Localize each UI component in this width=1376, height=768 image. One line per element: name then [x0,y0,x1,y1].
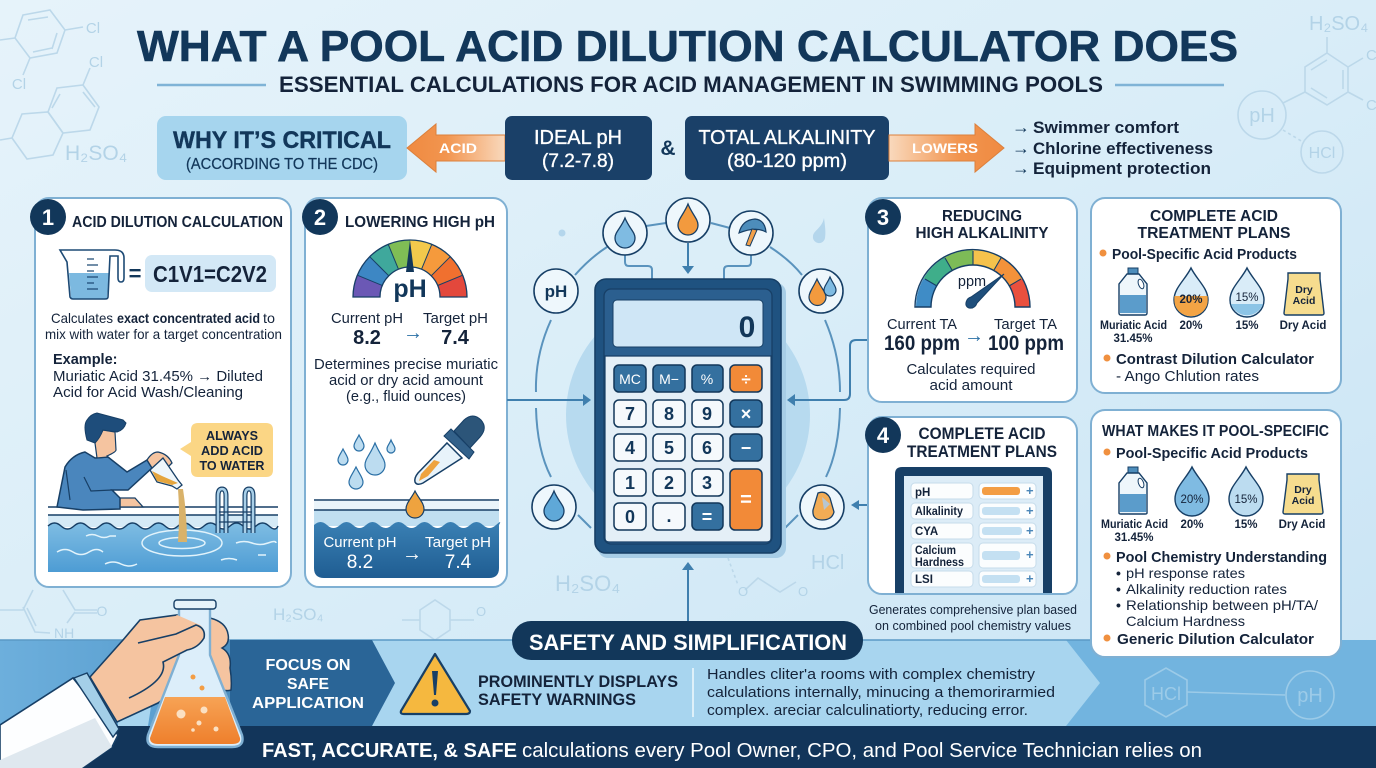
thumb [140,615,204,672]
icon node: blue drop lower [532,485,576,529]
small decorative blobs [558,218,825,243]
background formula labels: HCl [1309,145,1335,162]
arrow: panel 4 to hcl node [851,500,868,510]
divider and simplification text: Handles cliter'a rooms with complex chemistry [707,666,1036,683]
icon: dry acid bag [1284,273,1324,315]
ideal pH box: (7.2-7.8) [542,151,614,172]
icon: 15 percent drop: 15% [1235,292,1259,304]
example text: Muriatic Acid 31.45% → Diluted [53,369,263,385]
icon: 20 percent drop [1174,268,1208,317]
why it's critical box [157,116,407,180]
pool water with readings: → [402,543,422,565]
TA readings [884,316,1064,355]
calculator keypad: 9 [702,404,712,424]
background formula labels: NH [54,625,74,641]
heading 3 [916,208,1049,242]
heading [1138,208,1291,242]
pool water with readings [314,491,500,578]
why it's critical box: WHY IT’S CRITICAL [173,127,391,154]
calculator keypad: 2 [664,473,674,493]
tablet with chemistry fields [895,467,1052,593]
total alkalinity box: (80-120 ppm) [727,151,847,172]
background formula labels: Cl [89,54,103,71]
glow circle behind calculator [566,293,810,537]
badge 4: 4 [877,423,890,448]
connectors around calculator [536,223,840,528]
heading 3: HIGH ALKALINITY [916,225,1049,242]
TA readings: 160 ppm [884,332,960,355]
subheading contrast: - Ango Chlution rates [1116,369,1259,385]
divider and simplification text: calculations internally, minucing a themorirarmied [707,684,1055,701]
benefits list: → [1012,158,1030,178]
alkalinity gauge [915,250,1030,308]
background formula labels: HCl [811,552,844,574]
badge 3 [865,199,901,235]
panel: what makes it pool-specific [1091,410,1341,657]
pH gauge [353,240,467,303]
divider and simplification text: complex. areciar calculinatiorty, reducing error. [707,702,1028,719]
icon: muriatic bottle [1119,467,1147,514]
icon: muriatic bottle [1119,268,1147,315]
tablet with chemistry fields: + [1026,571,1034,586]
background formula labels: O [738,584,748,599]
product labels: Dry Acid [1280,320,1326,332]
footer [0,726,1376,768]
calculator [595,279,786,558]
badge 1: 1 [42,205,54,230]
title: WHAT A POOL ACID DILUTION CALCULATOR DOES [137,22,1238,71]
heading 2: LOWERING HIGH pH [345,214,495,231]
formula pill: C1V1=C2V2 [153,261,267,287]
pool water with readings: 8.2 [347,552,373,573]
tablet with chemistry fields: LSI [915,574,933,586]
calculator keypad: 6 [702,438,712,458]
badge 2 [302,199,338,235]
calculator keypad: ÷ [741,370,751,389]
calculator keypad: 4 [625,438,635,458]
subheading contrast [1104,351,1314,385]
pool chemistry understanding list: Relationship between pH/TA/ [1126,597,1318,613]
alkalinity gauge: ppm [958,274,986,290]
arrow: top drop to calculator [682,243,694,274]
chevron: focus on safe application: SAFE [287,676,329,693]
pool chemistry understanding list [1104,549,1327,629]
heading 4: TREATMENT PLANS [907,443,1057,461]
tablet with chemistry fields: + [1026,523,1034,538]
icon: water drops [338,435,395,489]
flask [147,600,243,747]
calculator keypad: . [666,506,672,526]
icon node: two drops [799,269,843,313]
calculator keypad: 5 [664,438,674,458]
description 1: exact concentrated acid [117,310,260,326]
badge 4 [865,417,901,453]
caption for step 4: Generates comprehensive plan based [869,603,1077,617]
pool chemistry understanding list: pH response rates [1126,565,1245,581]
product labels [1100,320,1326,345]
pool chemistry understanding list: Calcium Hardness [1126,613,1245,629]
panel: reducing high alkalinity [865,198,1077,402]
calculator keypad: MC [619,371,641,387]
arrow: panel 2 to calculator [507,394,591,406]
caption for step 4 [869,603,1077,633]
pool chemistry understanding list: • [1116,565,1121,581]
current and target pH readings: → [403,322,423,344]
background formula labels: O [476,604,486,619]
background formula labels: H₂SO₄ [1309,13,1368,35]
product labels: 15% [1235,320,1259,332]
background formula labels: H₂SO₄ [273,605,323,624]
example text: Example: [53,352,117,368]
icon node: dry acid rock [800,485,844,529]
callout: always add acid to water: TO WATER [200,459,264,473]
chevron: focus on safe application [230,640,395,726]
icon: dropper [415,416,484,484]
calculator keypad: 1 [625,473,635,493]
lab coat sleeve [0,673,119,768]
icon: 20 percent drop [1175,467,1209,516]
tablet with chemistry fields: Hardness [915,557,964,569]
ideal pH box [505,116,652,180]
safety warnings text [478,672,678,709]
product labels: Muriatic Acid [1100,320,1167,332]
heading 4: COMPLETE ACID [918,425,1046,443]
icon node: pH: pH [545,282,567,301]
acid arrow: ACID [439,140,477,156]
icon node: orange drop [666,198,710,242]
subheading contrast: Contrast Dilution Calculator [1116,351,1314,368]
pool water with readings: Current pH [324,534,396,551]
why it's critical box: (ACCORDING TO THE CDC) [186,156,378,173]
badge 2: 2 [314,205,326,230]
background formula labels: Cl [86,20,100,37]
example text [53,352,263,401]
product labels: 31.45% [1114,532,1154,544]
calculator keypad: × [741,404,751,424]
tablet with chemistry fields: Alkalinity [915,506,964,518]
acid arrow [407,124,505,172]
background formula labels: H₂SO₄ [65,142,127,165]
description 1: Calculates [51,310,113,326]
pool chemistry understanding list: Alkalinity reduction rates [1126,581,1287,597]
description 2: acid or dry acid amount [329,373,483,389]
safety warnings text: SAFETY WARNINGS [478,690,636,709]
benefits list: Chlorine effectiveness [1033,140,1213,158]
background formula labels: pH [1249,105,1275,127]
divider and simplification text [693,666,1055,719]
panel: lowering high pH [302,198,507,587]
product labels: 20% [1179,320,1203,332]
product labels: 20% [1180,519,1204,531]
pH gauge: pH [393,275,427,303]
footer: calculations every Pool Owner, CPO, and Pool Service Technician relies on [522,740,1202,762]
icon: warning triangle [401,654,470,714]
tablet with chemistry fields: + [1026,483,1034,498]
background formula labels: H₂SO₄ [555,571,620,596]
total alkalinity box: TOTAL ALKALINITY [698,127,876,149]
footer: FAST, ACCURATE, & SAFE [262,740,517,762]
band chemistry ghost labels: pH [1297,685,1323,707]
icon: 20 percent drop: 20% [1180,494,1204,506]
calculator keypad: − [741,438,751,458]
description 3: Calculates required [906,362,1036,378]
band chemistry ghost labels [1145,668,1334,719]
calculator keypad: M− [659,371,679,387]
arrow: safety to calculator [682,562,694,622]
tablet with chemistry fields: + [1026,547,1034,562]
band chemistry ghost labels: HCl [1151,684,1181,704]
badge 3: 3 [877,205,889,230]
formula pill [145,255,276,292]
generic dilution calculator: Generic Dilution Calculator [1117,631,1314,648]
product labels: Dry Acid [1279,519,1325,531]
description 2 [314,357,498,405]
heading 1: ACID DILUTION CALCULATION [72,214,283,231]
current and target pH readings: 7.4 [441,327,470,349]
current and target pH readings: 8.2 [353,327,381,349]
heading: TREATMENT PLANS [1138,225,1291,242]
thumb outline [129,625,204,698]
product labels: Muriatic Acid [1101,519,1168,531]
chevron: focus on safe application: FOCUS ON [266,657,350,674]
badge 1 [30,199,66,235]
icon node: water drop [603,211,647,255]
description 1 [45,310,282,342]
icon: dry acid bag [1283,474,1323,514]
heading 4 [907,425,1057,461]
icon: 15 percent drop [1229,467,1263,516]
callout: always add acid to water: ALWAYS [206,429,258,443]
subtitle: ESSENTIAL CALCULATIONS FOR ACID MANAGEMENT IN SWIMMING POOLS [279,72,1103,97]
TA readings: 100 ppm [988,332,1064,355]
benefits list: Equipment protection [1033,160,1211,178]
caption for step 4: on combined pool chemistry values [875,619,1071,633]
panel: complete acid treatment plans (step 4) [865,417,1077,594]
ampersand: & [660,137,676,160]
calculator keypad: = [740,489,752,511]
heading: WHAT MAKES IT POOL-SPECIFIC [1102,423,1329,440]
panel: complete acid treatment plans [1091,198,1341,393]
chevron: focus on safe application: APPLICATION [252,695,364,712]
current and target pH readings: Target pH [423,310,488,327]
calculator keypad: 7 [625,404,635,424]
heading: COMPLETE ACID [1150,208,1278,225]
tablet with chemistry fields: CYA [915,526,938,538]
panel: acid dilution calculation [30,198,291,587]
lowers arrow [889,124,1004,172]
description 2: Determines precise muriatic [314,357,498,373]
background formula labels: Cl [12,76,26,93]
benefits list: → [1012,117,1030,137]
pool water with readings: Target pH [425,534,491,551]
equals sign: = [129,261,141,286]
example text: Acid for Acid Wash/Cleaning [53,385,243,401]
calculator keypad: 0 [625,507,635,527]
pool chemistry understanding list: • [1116,597,1121,613]
icon: measuring beaker [60,250,124,299]
calculator keypad: % [701,371,713,387]
arrow: panel 3 to calculator [787,340,868,406]
description 1: to [263,310,275,326]
illustration: hand holding flask [0,600,243,768]
icon node: umbrella tool [729,211,773,255]
calculator keypad: 8 [664,404,674,424]
light patch beneath wrist [118,700,152,726]
pool chemistry understanding list: • [1116,581,1121,597]
callout: always add acid to water: ADD ACID [201,444,263,458]
product labels [1101,519,1325,544]
pool chemistry understanding list: Pool Chemistry Understanding [1116,549,1327,566]
pool water with readings: 7.4 [445,552,472,573]
subheading products: Pool-Specific Acid Products [1116,445,1308,462]
TA readings: Current TA [887,316,957,333]
description 3 [906,362,1036,394]
illustration: pouring acid into pool [48,413,278,572]
calculator display [613,300,763,347]
background formula labels: O [97,603,108,619]
fingers behind flask [205,618,231,691]
benefits list: Swimmer comfort [1033,119,1180,137]
icon: 15 percent drop [1230,268,1264,317]
heading 3: REDUCING [942,208,1022,225]
subheading products: Pool-Specific Acid Products [1112,246,1297,263]
description 2: (e.g., fluid ounces) [346,389,466,405]
calculator keypad: 3 [702,473,712,493]
tablet with chemistry fields: Calcium [915,545,956,557]
safety warnings text: PROMINENTLY DISPLAYS [478,672,678,691]
calculator keypad: = [702,507,712,527]
total alkalinity box [685,116,889,180]
safety and simplification pill [512,621,863,660]
product labels: 15% [1234,519,1258,531]
description 3: acid amount [930,378,1012,394]
lowers arrow: LOWERS [912,140,978,156]
TA readings: Target TA [994,316,1057,333]
ideal pH box: IDEAL pH [534,127,622,149]
TA readings: → [964,325,984,347]
icon: dry acid bag: Acid [1292,495,1314,507]
current and target pH readings [331,310,488,349]
palm [90,615,200,722]
product labels: 31.45% [1113,333,1153,345]
benefits list [1012,117,1213,178]
calculator display: 0 [739,311,755,344]
icon: dry acid bag: Acid [1293,295,1315,307]
calculator keypad [605,356,771,542]
background formula labels: O [798,584,808,599]
description 1: mix with water for a target concentration [45,326,282,342]
icon: dry acid bag: Dry [1295,284,1313,296]
current and target pH readings: Current pH [331,310,403,327]
icon: 20 percent drop: 20% [1179,294,1203,306]
icon: 15 percent drop: 15% [1234,494,1258,506]
callout: always add acid to water [180,423,273,477]
icon: dry acid bag: Dry [1294,484,1312,496]
icon node: pH [534,269,578,313]
safety and simplification pill: SAFETY AND SIMPLIFICATION [529,630,847,655]
bottom band [0,640,1376,726]
benefits list: → [1012,138,1030,158]
tablet with chemistry fields: + [1026,503,1034,518]
tablet with chemistry fields: pH [915,487,930,499]
